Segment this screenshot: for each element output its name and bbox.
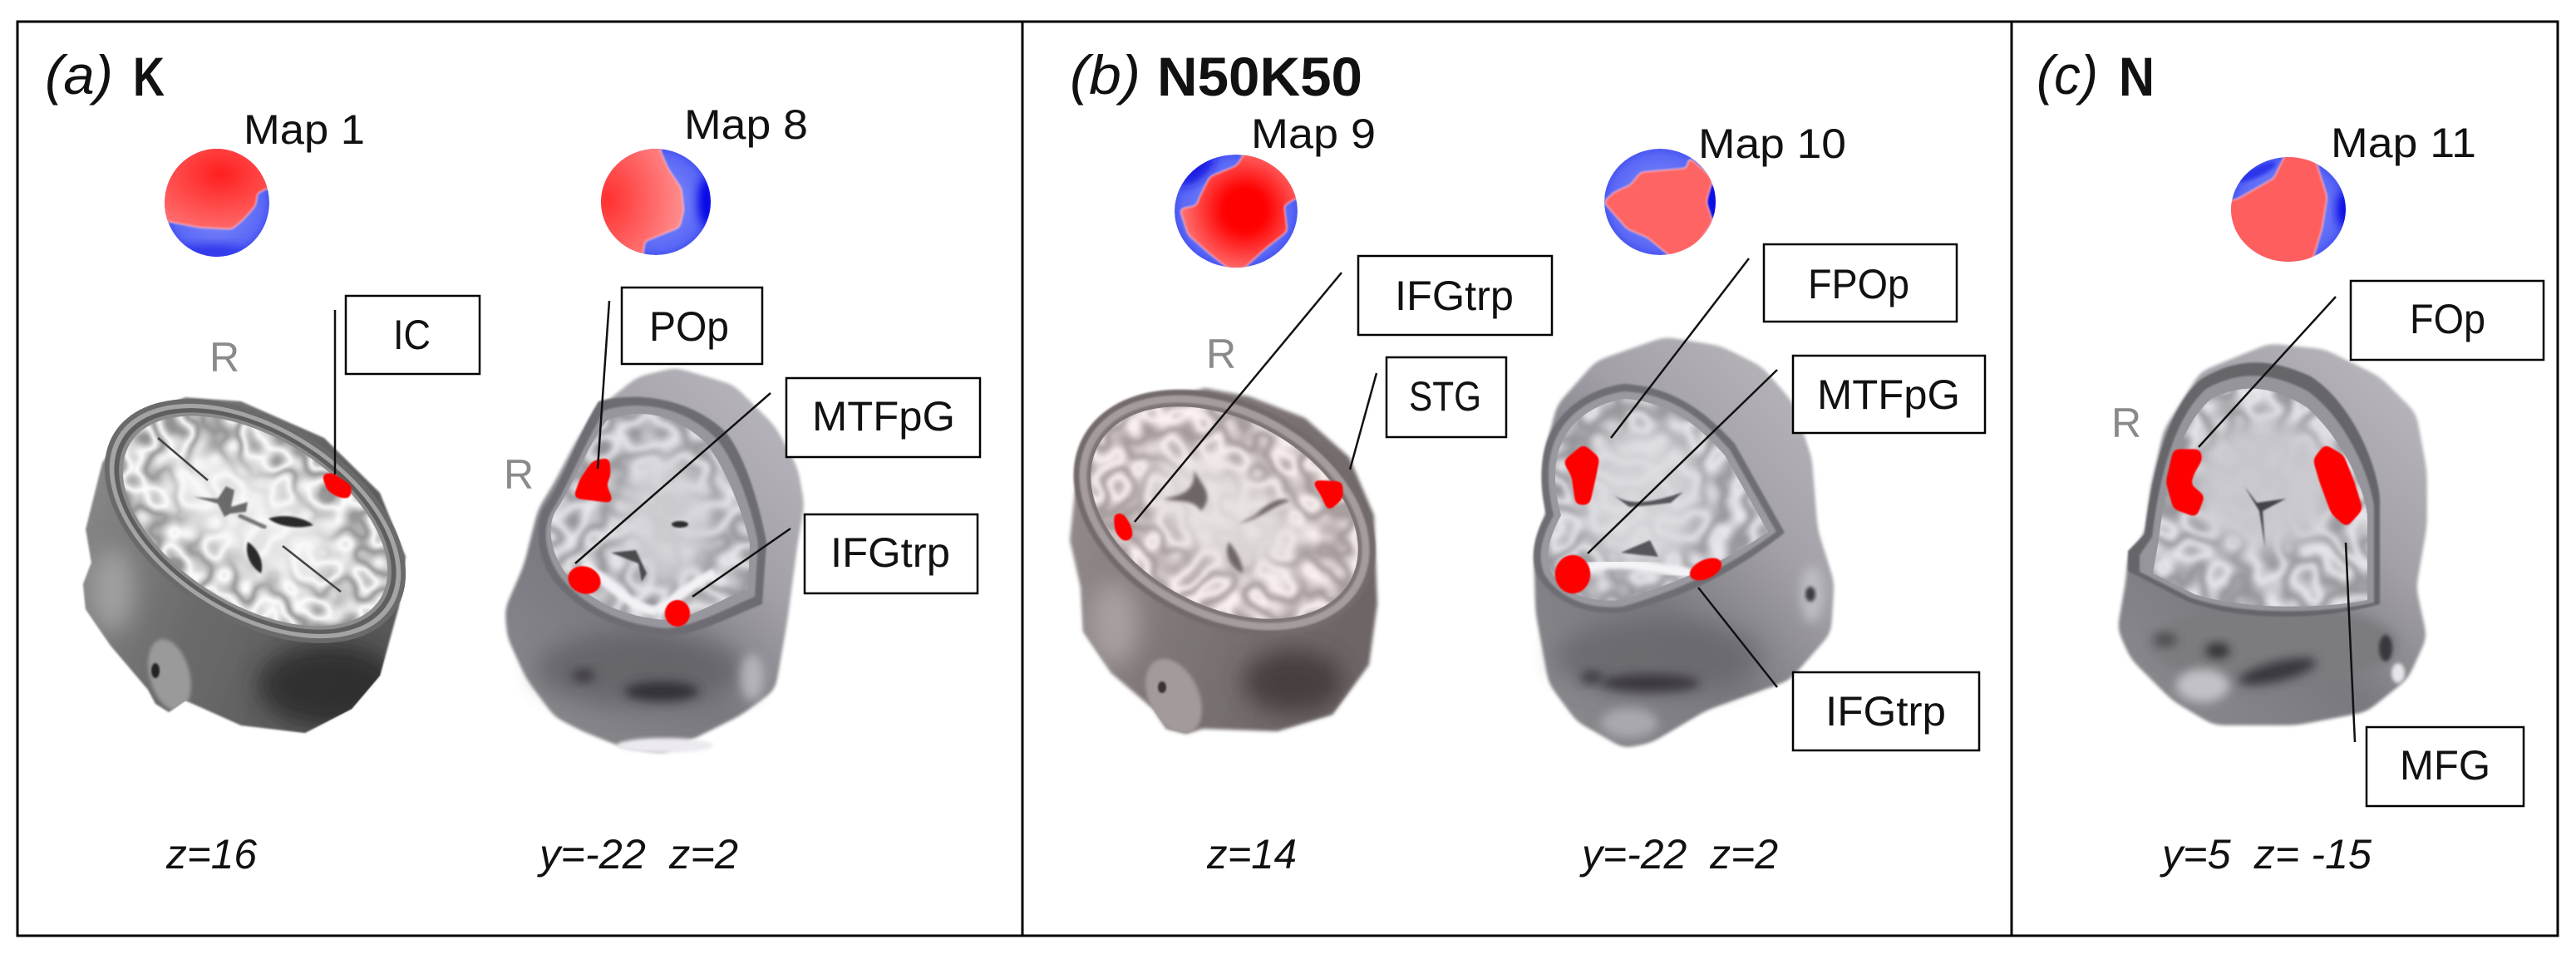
leader line: IFGtrp lower xyxy=(1698,588,1777,687)
activation: POp xyxy=(574,458,613,503)
callout: IC: IC xyxy=(393,312,431,358)
activation: IFGtrp xyxy=(1114,514,1133,542)
callout: MFG: MFG xyxy=(2400,742,2490,789)
callout: IFGtrp: IFGtrp xyxy=(830,529,950,576)
leader line: STG xyxy=(1350,373,1377,470)
panel: (c) N xyxy=(2037,44,2544,878)
heading: (b) N50K50 xyxy=(1070,44,1362,107)
activation: IFGtrp xyxy=(665,600,690,627)
heading: (c) N xyxy=(2037,44,2155,107)
label: Map 9: Map 9 xyxy=(1251,111,1376,157)
heading: (a) K: K xyxy=(133,46,165,107)
panel: (a) K xyxy=(45,44,980,878)
callout: MTFpG: MTFpG xyxy=(812,393,955,440)
callout: FOp: FOp xyxy=(2410,296,2485,342)
brain: cut head y=-22 z=2 xyxy=(1534,337,1835,749)
callout: FPOp xyxy=(1764,244,1957,322)
leader line: IC xyxy=(334,310,336,475)
coordinate: y=5 z=-15: y=5 z= -15 xyxy=(2160,831,2372,878)
callout: MTFpG xyxy=(1793,356,1985,433)
leader line: FPOp xyxy=(1611,258,1749,438)
label: R: R xyxy=(2111,400,2141,446)
brain: axial slice z=16 xyxy=(81,396,407,735)
callout: FOp xyxy=(2351,281,2544,360)
leader line: IFGtrp xyxy=(692,529,791,597)
leader line: MFG xyxy=(2346,543,2355,742)
topographic map 10 xyxy=(1604,149,1717,256)
callout: STG: STG xyxy=(1409,373,1481,420)
label: Map 1: Map 1 xyxy=(244,106,365,153)
leader line: MTFpG xyxy=(575,393,771,563)
brain: axial slice z=14 xyxy=(1067,386,1380,736)
label: R (faint): R xyxy=(1544,511,1571,552)
label: R (left): R xyxy=(1206,331,1236,377)
label: Map 11: Map 11 xyxy=(2331,120,2476,166)
activation: MTFpG xyxy=(1555,555,1590,593)
heading: (b) N50K50: (b) xyxy=(1070,44,1140,106)
callout: MFG xyxy=(2367,727,2524,806)
callout: POp xyxy=(622,288,762,364)
callout: IFGtrp lower: IFGtrp xyxy=(1825,688,1946,735)
heading: (c) N: N xyxy=(2119,46,2155,107)
leader line: FOp xyxy=(2199,297,2336,447)
leader line: IFGtrp xyxy=(1135,273,1342,522)
label: R (right): R xyxy=(504,451,534,498)
callout: MTFpG: MTFpG xyxy=(1817,371,1960,418)
label: R (left): R xyxy=(209,334,239,381)
callout: FPOp: FPOp xyxy=(1808,261,1909,307)
coordinate: y=-22 z=2: y=-22 z=2 xyxy=(537,831,738,878)
callout: IFGtrp xyxy=(805,514,978,593)
callout: STG xyxy=(1387,357,1506,437)
activation: FOp xyxy=(2166,450,2204,517)
activation: FPOp xyxy=(1564,445,1599,504)
callout: MTFpG xyxy=(786,378,980,457)
panel: (b) N50K50 xyxy=(1031,44,1985,878)
brain: cut head y=-22 z=2 xyxy=(505,367,805,754)
callout: POp: POp xyxy=(649,303,729,350)
heading: (c) N: (c) xyxy=(2037,44,2098,106)
callout: IFGtrp: IFGtrp xyxy=(1395,273,1514,319)
heading: (b) N50K50: N50K50 xyxy=(1157,46,1362,107)
callout: IFGtrp xyxy=(1358,256,1552,335)
topographic map 1 xyxy=(165,149,269,257)
activation: IFGtrp xyxy=(1686,553,1726,585)
heading: (a) K xyxy=(45,44,165,107)
callout: IFGtrp lower xyxy=(1793,672,1979,750)
topographic map 11 xyxy=(2231,157,2346,262)
heading: (a) K: (a) xyxy=(45,44,113,106)
brain: cut head y=5 z=-15 xyxy=(2117,343,2427,725)
label: Map 10: Map 10 xyxy=(1698,120,1846,167)
topographic map 9 xyxy=(1175,155,1298,268)
coordinate: z=14: z=14 xyxy=(1206,831,1297,878)
topographic map 8 xyxy=(601,149,711,255)
leader line: MTFpG xyxy=(1588,370,1777,553)
activation: STG xyxy=(1312,480,1342,511)
leader line: POp xyxy=(598,301,609,469)
coordinate: y=-22 z=2: y=-22 z=2 xyxy=(1579,831,1778,878)
callout: IC xyxy=(346,296,480,374)
coordinate: z=16: z=16 xyxy=(165,831,257,878)
activation: IC xyxy=(322,474,352,499)
activation: MTFpG xyxy=(564,562,604,598)
label: Map 8: Map 8 xyxy=(684,101,808,148)
activation: MFG xyxy=(2313,445,2362,527)
